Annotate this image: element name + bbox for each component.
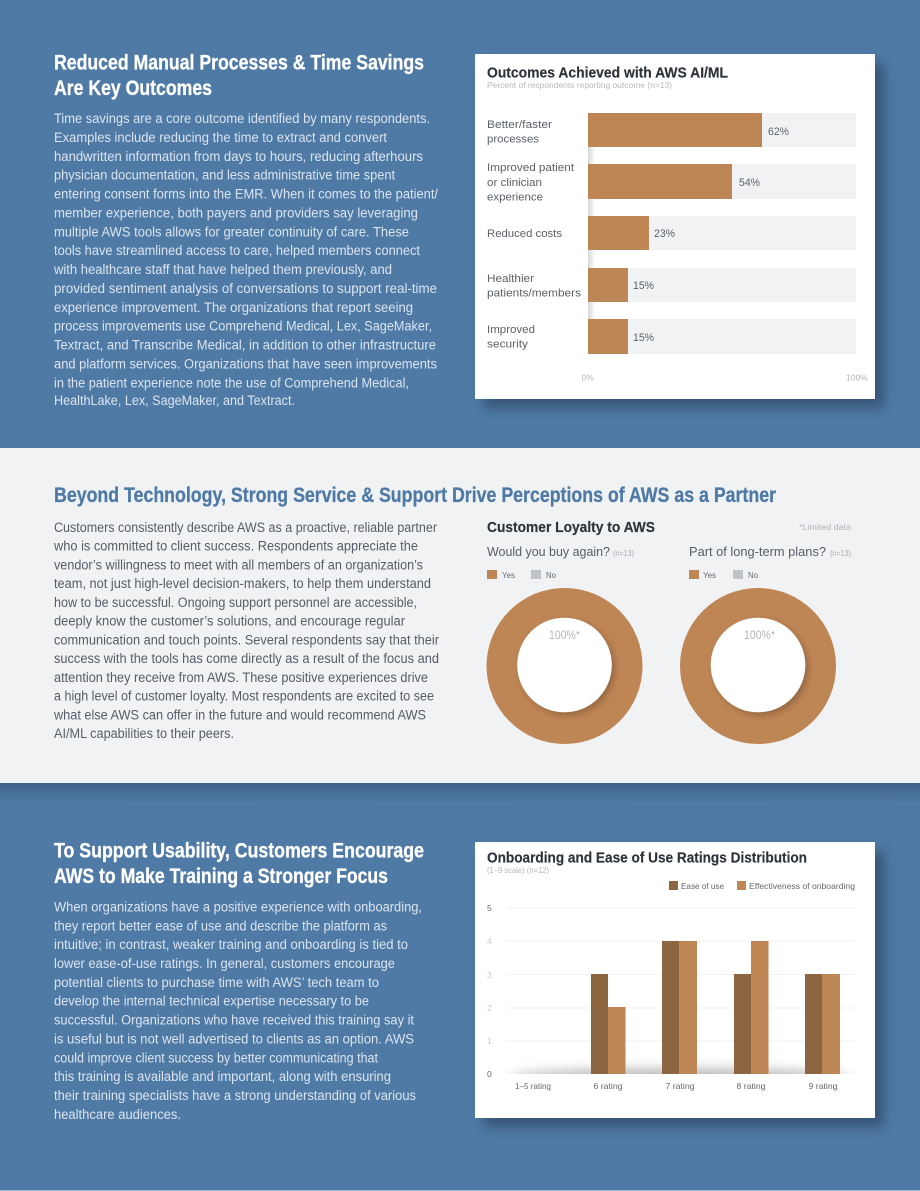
heading: reduced manual processes: Are Key Outcomes	[54, 77, 212, 100]
text block: onboarding paragraph: healthcare audiences.	[54, 1107, 181, 1122]
text block: time savings paragraph: with healthcare staff that have helped them previously, and	[53, 262, 392, 277]
text block: time savings paragraph: Textract, and Transcribe Medical, in addition to other infrastructure	[54, 338, 436, 353]
horizontal bar chart: processes	[487, 134, 540, 146]
text block: time savings paragraph: provided sentiment analysis of conversations to support real-time	[54, 281, 437, 296]
text block: time savings paragraph: Time savings are a core outcome identified by many respondents.	[54, 111, 430, 126]
text block: time savings paragraph: handwritten information from days to hours, reducing afterhours	[54, 149, 423, 164]
text block: onboarding paragraph: successful. Organizations who have received this training say it	[54, 1013, 414, 1028]
text block: time savings paragraph: Examples include reducing the time to extract and convert	[54, 130, 387, 145]
donut chart: part of long-term plans: 100%*	[744, 628, 775, 642]
horizontal bar chart: patients/members	[487, 288, 582, 300]
text block: time savings paragraph: experience improvement. The organizations that report seeing	[54, 300, 413, 315]
horizontal bar chart: experience	[487, 192, 543, 204]
donut chart: part of long-term plans: Part of long-term plans?	[689, 544, 826, 559]
text block: onboarding paragraph: is useful but is not well advertised to clients as an option. AWS	[54, 1031, 414, 1046]
horizontal bar chart: 100%	[846, 372, 868, 382]
horizontal bar chart: 15%	[633, 280, 654, 292]
text block: time savings paragraph: HealthLake, Lex, SageMaker, and Textract.	[54, 393, 295, 408]
text block: onboarding paragraph: this training is available and important, along with ensuring	[54, 1069, 391, 1084]
text block: customers paragraph: attention they receive from AWS. These positive experiences drive	[54, 670, 428, 685]
text block: onboarding paragraph: lower ease-of-use ratings. In general, customers encourage	[54, 956, 395, 971]
heading: beyond technology: Beyond Technology, Strong Service & Support Drive Perceptions of AWS as a Partner	[54, 484, 776, 507]
horizontal bar chart: 15%	[633, 332, 654, 344]
text block: customers paragraph: what else AWS can offer in the future and would recommend AWS	[53, 708, 426, 722]
text block: customers paragraph: a high level of customer loyalty. Most respondents are excited to see	[54, 689, 434, 704]
text block: time savings paragraph: process improvements use Comprehend Medical, Lex, SageMaker,	[54, 319, 432, 334]
panel: outcomes section text	[53, 52, 438, 408]
text block: customers paragraph: vendor’s willingness to meet with all members of an organization’s	[54, 558, 423, 572]
text block: customers paragraph: deeply know the customer’s solutions, and encourage regular	[54, 614, 405, 629]
text block: time savings paragraph	[53, 111, 438, 408]
text block: time savings paragraph: and platform services. Organizations that have seen improvements	[54, 356, 437, 372]
panel: training section text	[54, 840, 424, 1122]
horizontal bar chart: Improved	[487, 324, 535, 336]
chart title: Customer Loyalty to AWS	[487, 520, 655, 536]
horizontal bar chart: 54%	[739, 177, 760, 189]
donut chart: would you buy again: (n=13)	[613, 549, 634, 558]
grouped bar chart: 0	[487, 1069, 492, 1079]
donut chart: would you buy again	[486, 544, 642, 744]
text block: time savings paragraph: multiple AWS tools allows for greater continuity of care. These	[54, 224, 409, 239]
text block: time savings paragraph: entering consent forms into the EMR. When it comes to the patient/	[54, 187, 438, 202]
text block: customers paragraph: Customers consistently describe AWS as a proactive, reliable partner	[54, 520, 437, 535]
text block: customers paragraph	[53, 520, 439, 741]
heading: support usability: AWS to Make Training a Stronger Focus	[54, 865, 388, 888]
chart subtitle: (1–9 scale) (n=12)	[487, 866, 549, 875]
horizontal bar chart: Healthier	[487, 273, 534, 285]
text block: onboarding paragraph: When organizations have a positive experience with onboarding,	[54, 900, 422, 914]
text block: customers paragraph: team, not just high-level decision-makers, to help them understand	[54, 576, 431, 591]
grouped bar chart: 4	[487, 936, 492, 946]
text block: onboarding paragraph: develop the internal technical expertise necessary to be	[54, 994, 369, 1009]
grouped bar chart: 6 rating	[594, 1081, 623, 1091]
text block: onboarding paragraph: potential clients to purchase time with AWS’ tech team to	[54, 975, 379, 990]
panel: customer loyalty charts	[486, 520, 851, 744]
text block: onboarding paragraph	[54, 900, 422, 1122]
horizontal bar chart: 0%	[582, 372, 594, 382]
grouped bar chart: 8 rating	[736, 1081, 766, 1091]
note: limited data: *Limited data	[799, 522, 851, 532]
grouped bar chart: 3	[487, 970, 492, 980]
grouped bar chart	[487, 903, 855, 1091]
panel: onboarding chart card	[475, 842, 875, 1118]
heading: support usability	[54, 840, 424, 888]
text block: customers paragraph: communication and touch points. Several respondents say that their	[54, 632, 439, 648]
text block: customers paragraph: who is committed to client success. Respondents appreciate the	[53, 539, 418, 554]
text block: onboarding paragraph: their training specialists have a strong understanding of various	[54, 1088, 416, 1103]
horizontal bar chart: 62%	[768, 126, 789, 138]
horizontal bar chart: or clinician	[487, 177, 542, 189]
text block: time savings paragraph: member experience, both payers and providers say leveraging	[54, 206, 418, 220]
donut chart: part of long-term plans	[680, 544, 851, 744]
panel: service and support section text	[53, 484, 776, 741]
grouped bar chart: 2	[487, 1003, 492, 1013]
text block: time savings paragraph: in the patient experience note the use of Comprehend Medical,	[54, 375, 409, 390]
text block: customers paragraph: success with the tools has come directly as a result of the focus and	[54, 651, 439, 666]
panel: outcomes chart card	[475, 54, 875, 399]
text block: customers paragraph: AI/ML capabilities to their peers.	[54, 726, 234, 741]
chart title: Outcomes Achieved with AWS AI/ML	[487, 66, 728, 82]
horizontal bar chart	[487, 113, 868, 382]
horizontal bar chart: Better/faster	[487, 119, 552, 131]
horizontal bar chart: 23%	[654, 228, 675, 240]
text block: customers paragraph: how to be successful. Ongoing support personnel are accessible,	[54, 595, 417, 610]
donut chart: part of long-term plans: (n=13)	[830, 549, 851, 558]
chart subtitle: Percent of respondents reporting outcome (n=13)	[487, 81, 672, 90]
donut chart: would you buy again: Yes	[502, 570, 515, 580]
text block: onboarding paragraph: could improve client success by better communicating that	[54, 1050, 378, 1065]
grouped bar chart: 9 rating	[808, 1081, 838, 1091]
horizontal bar chart: Improved patient	[487, 162, 574, 174]
horizontal bar chart: Reduced costs	[487, 228, 563, 240]
grouped bar chart: 1–5 rating	[515, 1081, 551, 1091]
chart legend: Ease of use	[681, 881, 724, 891]
grouped bar chart: 5	[487, 903, 492, 913]
horizontal bar chart: security	[487, 338, 529, 350]
text block: time savings paragraph: physician documentation, and less administrative time spent	[54, 168, 395, 183]
donut chart: would you buy again: No	[546, 570, 556, 580]
chart legend: Effectiveness of onboarding	[749, 881, 855, 891]
donut chart: part of long-term plans: No	[748, 570, 758, 580]
grouped bar chart: 7 rating	[666, 1081, 695, 1091]
donut chart: part of long-term plans: Yes	[703, 570, 716, 580]
text block: onboarding paragraph: they report better ease of use and describe the platform as	[54, 918, 387, 933]
donut chart: would you buy again: 100%*	[549, 628, 580, 642]
chart title: Onboarding and Ease of Use Ratings Distribution	[487, 850, 807, 866]
chart legend	[669, 881, 855, 891]
heading: support usability: To Support Usability, Customers Encourage	[54, 840, 424, 862]
heading: reduced manual processes: Reduced Manual Processes & Time Savings	[54, 52, 424, 74]
text block: time savings paragraph: tools have streamlined access to care, helped members connect	[54, 243, 420, 258]
text block: onboarding paragraph: intuitive; in contrast, weaker training and onboarding is tied to	[54, 937, 408, 952]
heading: reduced manual processes	[54, 52, 424, 100]
donut chart: would you buy again: Would you buy again?	[487, 544, 610, 559]
grouped bar chart: 1	[487, 1036, 492, 1046]
